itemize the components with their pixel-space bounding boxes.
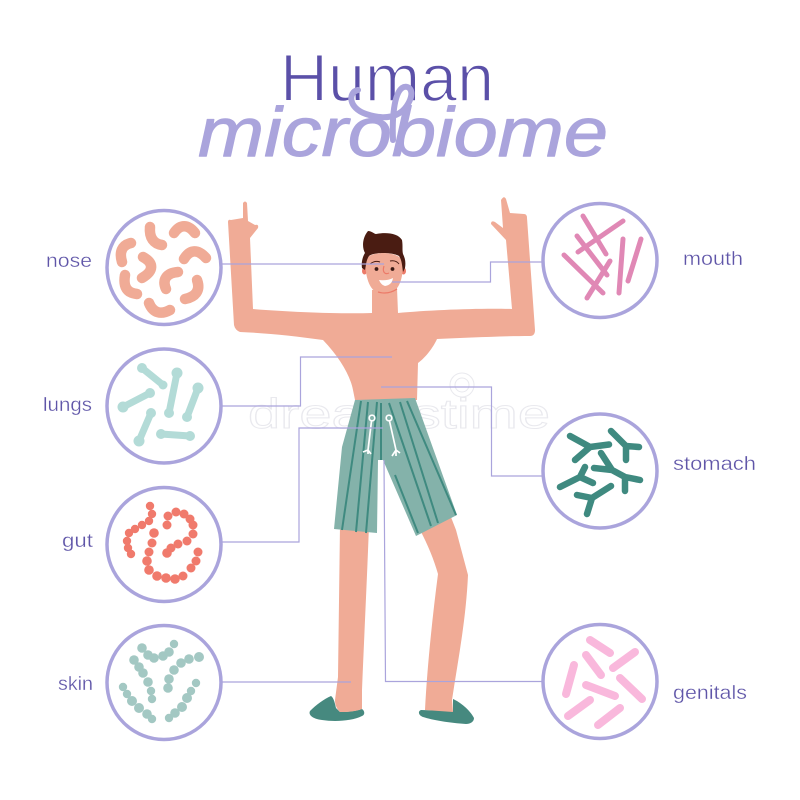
connector: mouth <box>392 262 542 282</box>
shorts stripes <box>342 401 456 533</box>
genitals bacteria <box>566 640 642 725</box>
connector: nose <box>222 263 384 265</box>
title <box>198 41 608 171</box>
label: lungs: lungs <box>43 395 92 416</box>
panel: skin <box>107 626 221 740</box>
skin bacteria <box>119 640 204 723</box>
hair <box>362 231 405 272</box>
nose <box>383 266 389 274</box>
connector: genitals <box>384 460 542 682</box>
label: gut: gut <box>62 531 94 552</box>
man figure <box>228 197 535 724</box>
panel: lungs <box>107 349 221 463</box>
mouth bacteria <box>564 216 641 298</box>
connector: skin <box>222 681 351 683</box>
right leg <box>420 512 468 712</box>
eyebrows <box>370 261 399 264</box>
panel: stomach <box>543 414 657 528</box>
chin line <box>378 289 397 293</box>
shorts <box>334 398 457 536</box>
connector: gut <box>222 428 383 542</box>
label: stomach: stomach <box>673 454 756 475</box>
smile <box>379 278 393 286</box>
panel: mouth <box>543 204 657 318</box>
title word: Human: Human <box>280 41 494 116</box>
eyes <box>375 267 378 271</box>
right shoe <box>419 699 474 724</box>
connector: lungs <box>222 357 392 406</box>
label: genitals: genitals <box>673 683 747 704</box>
head <box>362 231 406 294</box>
connector: stomach <box>381 387 542 476</box>
title flourish <box>351 87 411 140</box>
watermark <box>248 373 550 437</box>
gut bacteria <box>123 502 202 584</box>
panel: nose <box>107 210 221 324</box>
stomach bacteria <box>560 431 640 514</box>
watermark: dreamstime <box>248 390 550 437</box>
lungs bacteria <box>118 363 204 446</box>
panel: genitals <box>543 624 657 738</box>
torso and arms <box>228 197 535 400</box>
left shoe <box>310 696 364 721</box>
nose bacteria <box>121 226 206 313</box>
left leg <box>335 525 369 712</box>
label: nose: nose <box>46 251 92 272</box>
label: skin: skin <box>58 674 93 695</box>
label: mouth: mouth <box>683 249 743 270</box>
panel: gut <box>107 488 221 602</box>
drawstrings <box>363 415 400 456</box>
title word: microbiome: microbiome <box>198 93 608 171</box>
